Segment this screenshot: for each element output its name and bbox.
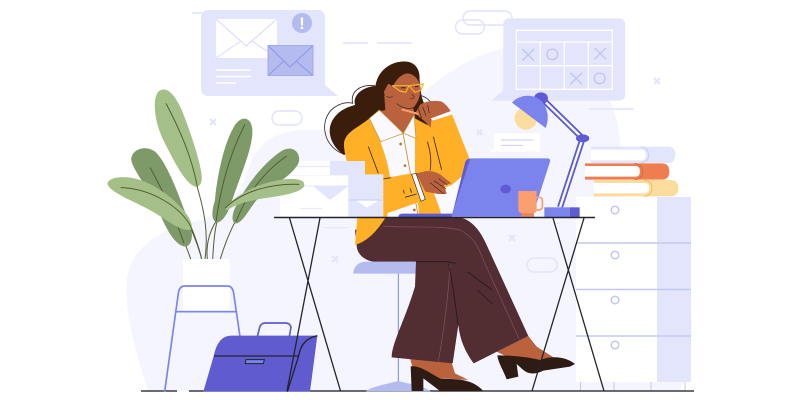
hair strand behind chin — [419, 95, 432, 103]
skin — [379, 73, 420, 135]
icon: alert badge: ! — [299, 14, 305, 33]
background blob — [127, 45, 692, 391]
eyes — [401, 86, 418, 88]
laptop side — [452, 158, 471, 217]
lamp light — [515, 107, 537, 130]
lower hand — [416, 171, 452, 194]
book: orange — [585, 163, 669, 180]
shirt — [369, 110, 419, 217]
smile — [397, 103, 415, 108]
lamp hinge — [534, 92, 548, 104]
icon: white envelope — [216, 19, 277, 58]
stack of books — [585, 147, 678, 196]
leaf: back left — [131, 148, 192, 247]
glasses — [392, 84, 423, 92]
finger lines — [418, 105, 429, 118]
laptop — [398, 158, 550, 217]
leaf: back right — [233, 149, 299, 223]
trousers and shoes — [355, 217, 575, 391]
laptop logo — [500, 185, 511, 193]
collar — [369, 110, 416, 142]
forearm sleeve — [383, 173, 425, 213]
desk lamp — [512, 92, 589, 217]
mug — [518, 191, 542, 217]
skin: upper ankle — [497, 336, 555, 364]
note card — [488, 133, 540, 152]
trousers — [355, 217, 528, 363]
calendar grid — [516, 30, 612, 89]
floor line — [141, 390, 694, 392]
ponytail outline — [325, 85, 375, 154]
placket and buttons — [399, 135, 418, 217]
lamp joint — [576, 134, 589, 142]
laptop base — [398, 214, 453, 217]
leaf: top — [155, 90, 202, 187]
panel: email speech bubble — [201, 10, 338, 96]
area beside lower hand — [437, 183, 457, 217]
shoe: right — [497, 355, 575, 379]
hair — [330, 61, 432, 155]
sleeve cuff — [412, 173, 425, 201]
desk top — [274, 216, 595, 218]
book: yellow — [594, 180, 678, 196]
paper below desk — [324, 226, 348, 229]
hair front — [376, 62, 420, 112]
panel: calendar speech bubble — [492, 18, 625, 101]
drawer cabinet — [576, 197, 691, 391]
plant pot — [183, 259, 230, 310]
lamp base — [544, 207, 580, 217]
hand at chin — [415, 101, 451, 128]
ear — [384, 84, 393, 97]
icon: blue envelope — [268, 46, 313, 76]
plant stand — [165, 286, 240, 392]
text lines — [216, 70, 251, 83]
nose — [410, 94, 414, 99]
shoe: left — [411, 366, 483, 391]
jacket: right panel and raised arm — [415, 113, 469, 217]
white cuff — [431, 111, 453, 121]
leaf: front left — [107, 177, 202, 259]
pencil — [402, 109, 418, 114]
document: front sheet — [280, 174, 383, 217]
stool — [353, 262, 431, 391]
stems — [178, 185, 240, 259]
desk — [274, 218, 604, 391]
skin: lower ankle — [410, 358, 468, 380]
sleeve details — [383, 178, 417, 197]
leaf: front right — [225, 179, 304, 211]
decorative marks — [192, 11, 660, 272]
finger lines — [430, 179, 447, 194]
jacket seams — [368, 137, 442, 173]
document: back sheet — [287, 161, 365, 175]
trouser seams — [383, 226, 519, 362]
jacket: left panel — [344, 118, 390, 245]
book: lavender — [591, 147, 675, 163]
calendar marks — [522, 48, 606, 84]
laptop lid — [451, 158, 550, 217]
plant — [107, 90, 304, 392]
lamp head — [512, 96, 548, 128]
neck and face — [376, 62, 453, 135]
lamp arms — [542, 98, 583, 207]
stacked documents on desk — [280, 161, 383, 228]
woman — [325, 61, 469, 245]
handbag — [203, 323, 317, 392]
desk legs — [287, 218, 604, 391]
leaf: centre — [212, 119, 252, 222]
